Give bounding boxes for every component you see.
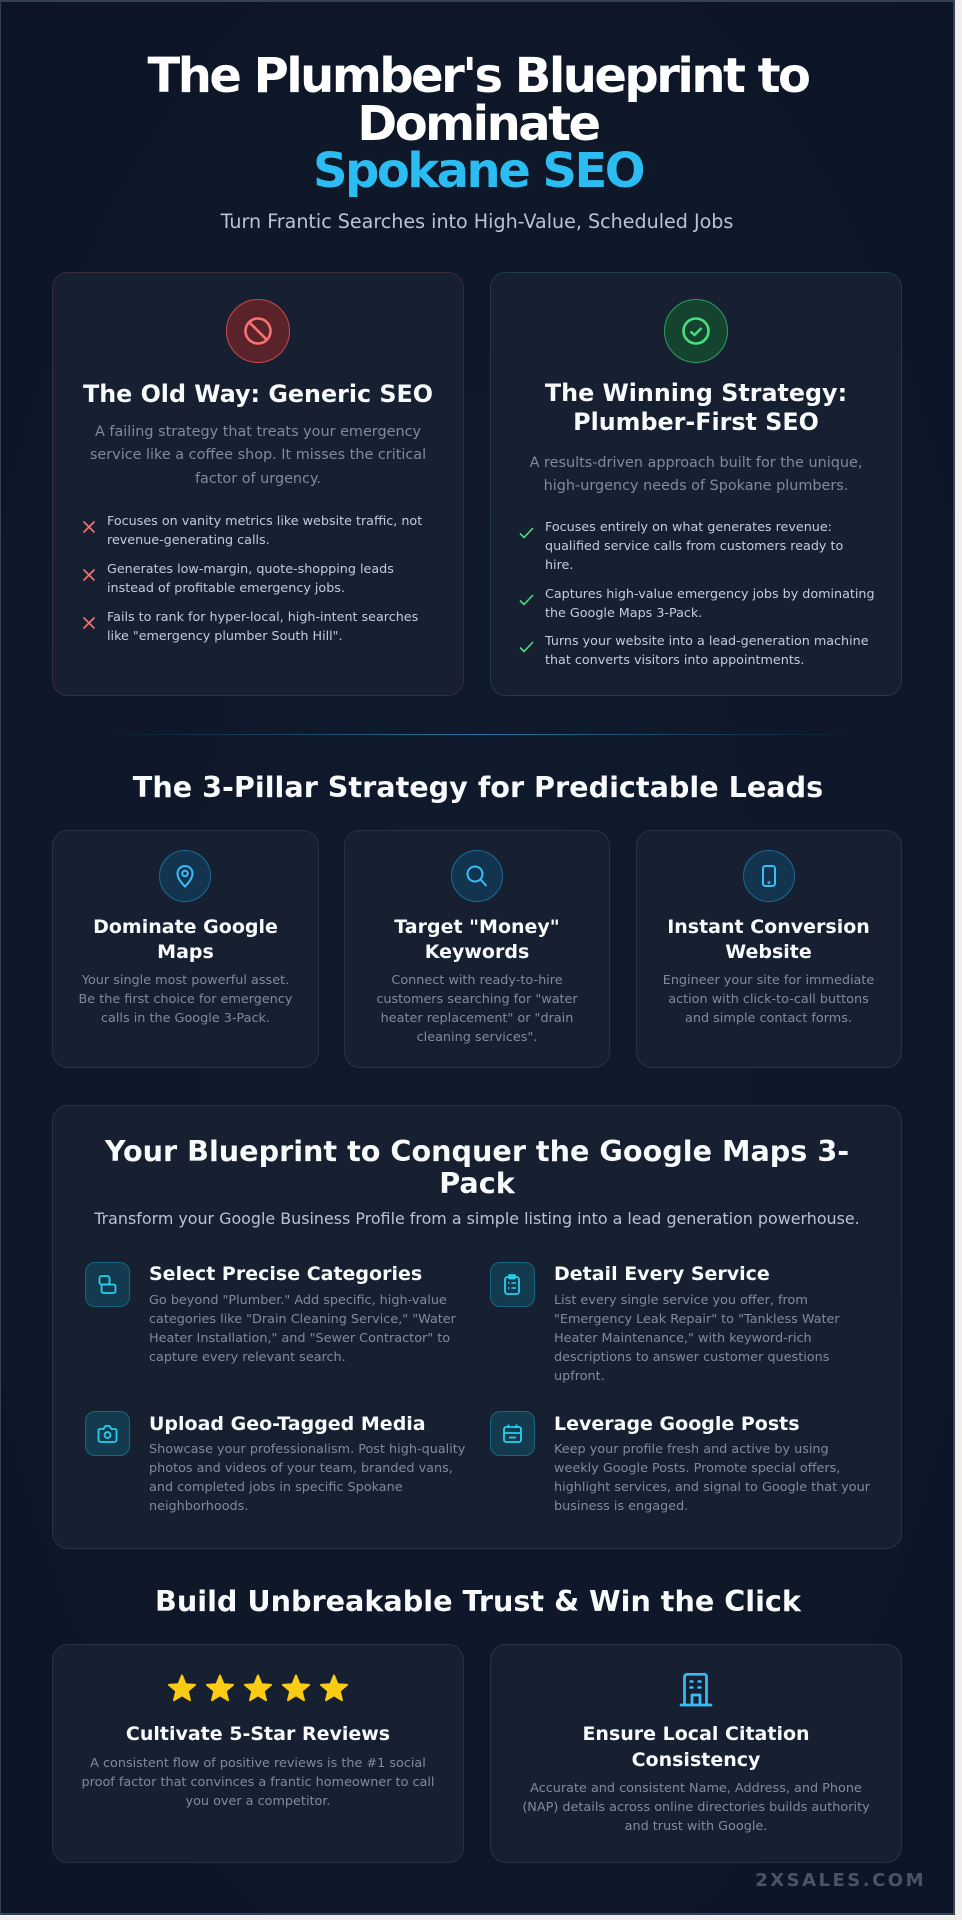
description: customers searching for "water bbox=[376, 992, 578, 1007]
description: A consistent flow of positive reviews is the #1 social bbox=[90, 1756, 426, 1771]
icon: check bbox=[520, 642, 534, 652]
icon: search bbox=[451, 850, 503, 902]
description: Heater Installation," and "Sewer Contractor" to bbox=[149, 1331, 450, 1346]
description: descriptions to answer customer questions bbox=[554, 1350, 829, 1365]
heading: Instant Conversion bbox=[667, 916, 870, 938]
panel: winning strategy bbox=[490, 272, 902, 696]
description: capture every relevant search. bbox=[149, 1350, 346, 1365]
heading bbox=[93, 916, 278, 963]
heading: old way: The Old Way: Generic SEO bbox=[83, 380, 433, 408]
description: winning strategy bbox=[530, 455, 862, 494]
description: weekly Google Posts. Promote special offers, bbox=[554, 1461, 840, 1476]
list: old way drawbacks bbox=[83, 513, 422, 643]
description bbox=[663, 973, 874, 1026]
text bbox=[107, 609, 418, 643]
icon: categories bbox=[85, 1262, 130, 1307]
description: highlight services, and signal to Google that your bbox=[554, 1480, 870, 1495]
panel: reviews bbox=[52, 1644, 464, 1863]
text bbox=[545, 519, 843, 572]
description: calls in the Google 3-Pack. bbox=[101, 1011, 270, 1026]
text: Focuses on vanity metrics like website traffic, not bbox=[107, 513, 422, 528]
description: business is engaged. bbox=[554, 1499, 688, 1514]
panel: google maps blueprint bbox=[52, 1105, 902, 1549]
text: that converts visitors into appointments. bbox=[545, 652, 804, 667]
list: winning strategy benefits bbox=[520, 519, 875, 667]
subtitle: Turn Frantic Searches into High-Value, Scheduled Jobs bbox=[221, 210, 733, 233]
description: winning strategy: A results-driven approach built for the unique, bbox=[530, 455, 862, 471]
drawback 1 bbox=[83, 513, 422, 547]
title: The Plumber's Blueprint to bbox=[147, 48, 809, 104]
heading bbox=[394, 916, 560, 963]
heading bbox=[667, 916, 870, 963]
icon: phone bbox=[742, 850, 794, 902]
text: the Google Maps 3-Pack. bbox=[545, 605, 702, 620]
icon: check circle bbox=[664, 299, 728, 363]
text: Focuses entirely on what generates revenue: bbox=[545, 519, 832, 534]
title bbox=[147, 48, 809, 199]
description bbox=[78, 973, 292, 1026]
heading: winning strategy: The Winning Strategy: bbox=[545, 379, 847, 407]
description: (NAP) details across online directories builds authority bbox=[522, 1800, 870, 1815]
text: qualified service calls from customers ready to bbox=[545, 538, 843, 553]
heading: Cultivate 5-Star Reviews bbox=[126, 1723, 390, 1745]
heading: Maps bbox=[157, 941, 214, 963]
description bbox=[554, 1442, 870, 1514]
description bbox=[53, 1754, 463, 1811]
icon: x bbox=[83, 520, 95, 534]
heading: Dominate Google bbox=[93, 916, 278, 938]
benefit 2 bbox=[520, 586, 875, 620]
item: categories bbox=[85, 1262, 456, 1365]
panel: pillar keywords bbox=[344, 830, 610, 1068]
icon: check bbox=[520, 528, 534, 538]
description: Go beyond "Plumber." Add specific, high-value bbox=[149, 1293, 447, 1308]
title: Spokane SEO bbox=[313, 143, 643, 199]
description: Accurate and consistent Name, Address, and Phone bbox=[530, 1781, 862, 1796]
title: Leverage Google Posts bbox=[554, 1413, 800, 1435]
text: hire. bbox=[545, 557, 573, 572]
description: Engineer your site for immediate bbox=[663, 973, 874, 988]
description: photos and videos of your team, branded vans, bbox=[149, 1461, 453, 1476]
text bbox=[544, 633, 869, 667]
description: you over a competitor. bbox=[186, 1794, 330, 1809]
description: Connect with ready-to-hire bbox=[391, 973, 563, 988]
description: Be the first choice for emergency bbox=[78, 992, 292, 1007]
description: cleaning services". bbox=[417, 1030, 537, 1045]
description: "Emergency Leak Repair" to "Tankless Water bbox=[554, 1312, 840, 1327]
heading: winning strategy: Plumber-First SEO bbox=[573, 408, 819, 436]
heading: build trust: Build Unbreakable Trust & Win the Click bbox=[155, 1584, 801, 1618]
description bbox=[149, 1442, 465, 1514]
icon: x bbox=[83, 568, 95, 582]
icon: building bbox=[680, 1673, 712, 1707]
item: posts bbox=[490, 1411, 870, 1514]
description: action with click-to-call buttons bbox=[668, 992, 869, 1007]
drawback 2 bbox=[83, 561, 394, 595]
drawback 3 bbox=[83, 609, 418, 643]
benefit 3 bbox=[520, 633, 869, 667]
description: and trust with Google. bbox=[625, 1819, 767, 1834]
description: Keep your profile fresh and active by using bbox=[554, 1442, 829, 1457]
item: media bbox=[85, 1411, 465, 1514]
icon: check bbox=[520, 594, 534, 606]
heading: Target "Money" bbox=[394, 916, 560, 938]
description: neighborhoods. bbox=[149, 1499, 248, 1514]
benefit 1 bbox=[520, 519, 843, 572]
description: old way: factor of urgency. bbox=[195, 471, 321, 487]
item: services bbox=[490, 1262, 840, 1384]
description bbox=[376, 973, 578, 1045]
icon: clipboard bbox=[490, 1262, 535, 1307]
icon: x bbox=[83, 616, 95, 630]
description: and completed jobs in specific Spokane bbox=[149, 1480, 403, 1495]
footer brand: 2XSALES.COM bbox=[755, 1870, 926, 1891]
heading: Ensure Local Citation bbox=[582, 1723, 810, 1745]
icon: five stars bbox=[168, 1674, 348, 1702]
text: Fails to rank for hyper-local, high-intent searches bbox=[107, 609, 418, 624]
panel: citations bbox=[490, 1644, 902, 1863]
description: winning strategy: high-urgency needs of Spokane plumbers. bbox=[544, 478, 848, 494]
description bbox=[554, 1293, 840, 1384]
panel: old way bbox=[52, 272, 464, 696]
description: old way: A failing strategy that treats your emergency bbox=[95, 424, 421, 440]
icon: camera bbox=[85, 1411, 130, 1456]
description: upfront. bbox=[554, 1369, 605, 1384]
text: Captures high-value emergency jobs by dominating bbox=[545, 586, 875, 601]
description: and simple contact forms. bbox=[685, 1011, 852, 1026]
heading: Keywords bbox=[425, 941, 529, 963]
description: Showcase your professionalism. Post high-quality bbox=[149, 1442, 465, 1457]
heading: Website bbox=[725, 941, 812, 963]
text bbox=[107, 513, 422, 547]
icon: calendar bbox=[490, 1411, 535, 1456]
heading bbox=[104, 1134, 849, 1200]
title: Detail Every Service bbox=[554, 1263, 770, 1285]
description: old way bbox=[90, 424, 426, 487]
text: instead of profitable emergency jobs. bbox=[107, 580, 345, 595]
heading: winning strategy bbox=[545, 379, 847, 436]
description bbox=[149, 1293, 456, 1365]
text: like "emergency plumber South Hill". bbox=[107, 628, 343, 643]
heading: Pack bbox=[439, 1166, 515, 1200]
heading: 3-pillar strategy: The 3-Pillar Strategy for Predictable Leads bbox=[133, 770, 823, 804]
description: heater replacement" or "drain bbox=[381, 1011, 573, 1026]
panel: pillar maps bbox=[52, 830, 319, 1068]
description: List every single service you offer, from bbox=[554, 1293, 808, 1308]
subheading: Transform your Google Business Profile from a simple listing into a lead generation powerhouse. bbox=[94, 1209, 860, 1228]
text: Generates low-margin, quote-shopping leads bbox=[107, 561, 394, 576]
description: Your single most powerful asset. bbox=[82, 973, 289, 988]
heading: Your Blueprint to Conquer the Google Maps 3- bbox=[105, 1134, 849, 1168]
text bbox=[107, 561, 394, 595]
description: proof factor that convinces a frantic homeowner to call bbox=[82, 1775, 434, 1790]
title: Select Precise Categories bbox=[149, 1263, 422, 1285]
icon: ban bbox=[226, 299, 290, 363]
description: categories like "Drain Cleaning Service," "Water bbox=[149, 1312, 456, 1327]
description: old way: service like a coffee shop. It misses the critical bbox=[90, 447, 426, 463]
title: Dominate bbox=[357, 96, 599, 152]
title: Upload Geo-Tagged Media bbox=[149, 1413, 426, 1435]
description bbox=[491, 1779, 901, 1836]
text: Turns your website into a lead-generation machine bbox=[545, 633, 869, 648]
panel: pillar website bbox=[636, 830, 902, 1068]
text: revenue-generating calls. bbox=[107, 532, 270, 547]
description: Heater Maintenance," with keyword-rich bbox=[554, 1331, 812, 1346]
icon: map pin bbox=[159, 850, 211, 902]
heading: Consistency bbox=[632, 1749, 760, 1771]
text bbox=[545, 586, 875, 620]
heading bbox=[491, 1722, 901, 1773]
